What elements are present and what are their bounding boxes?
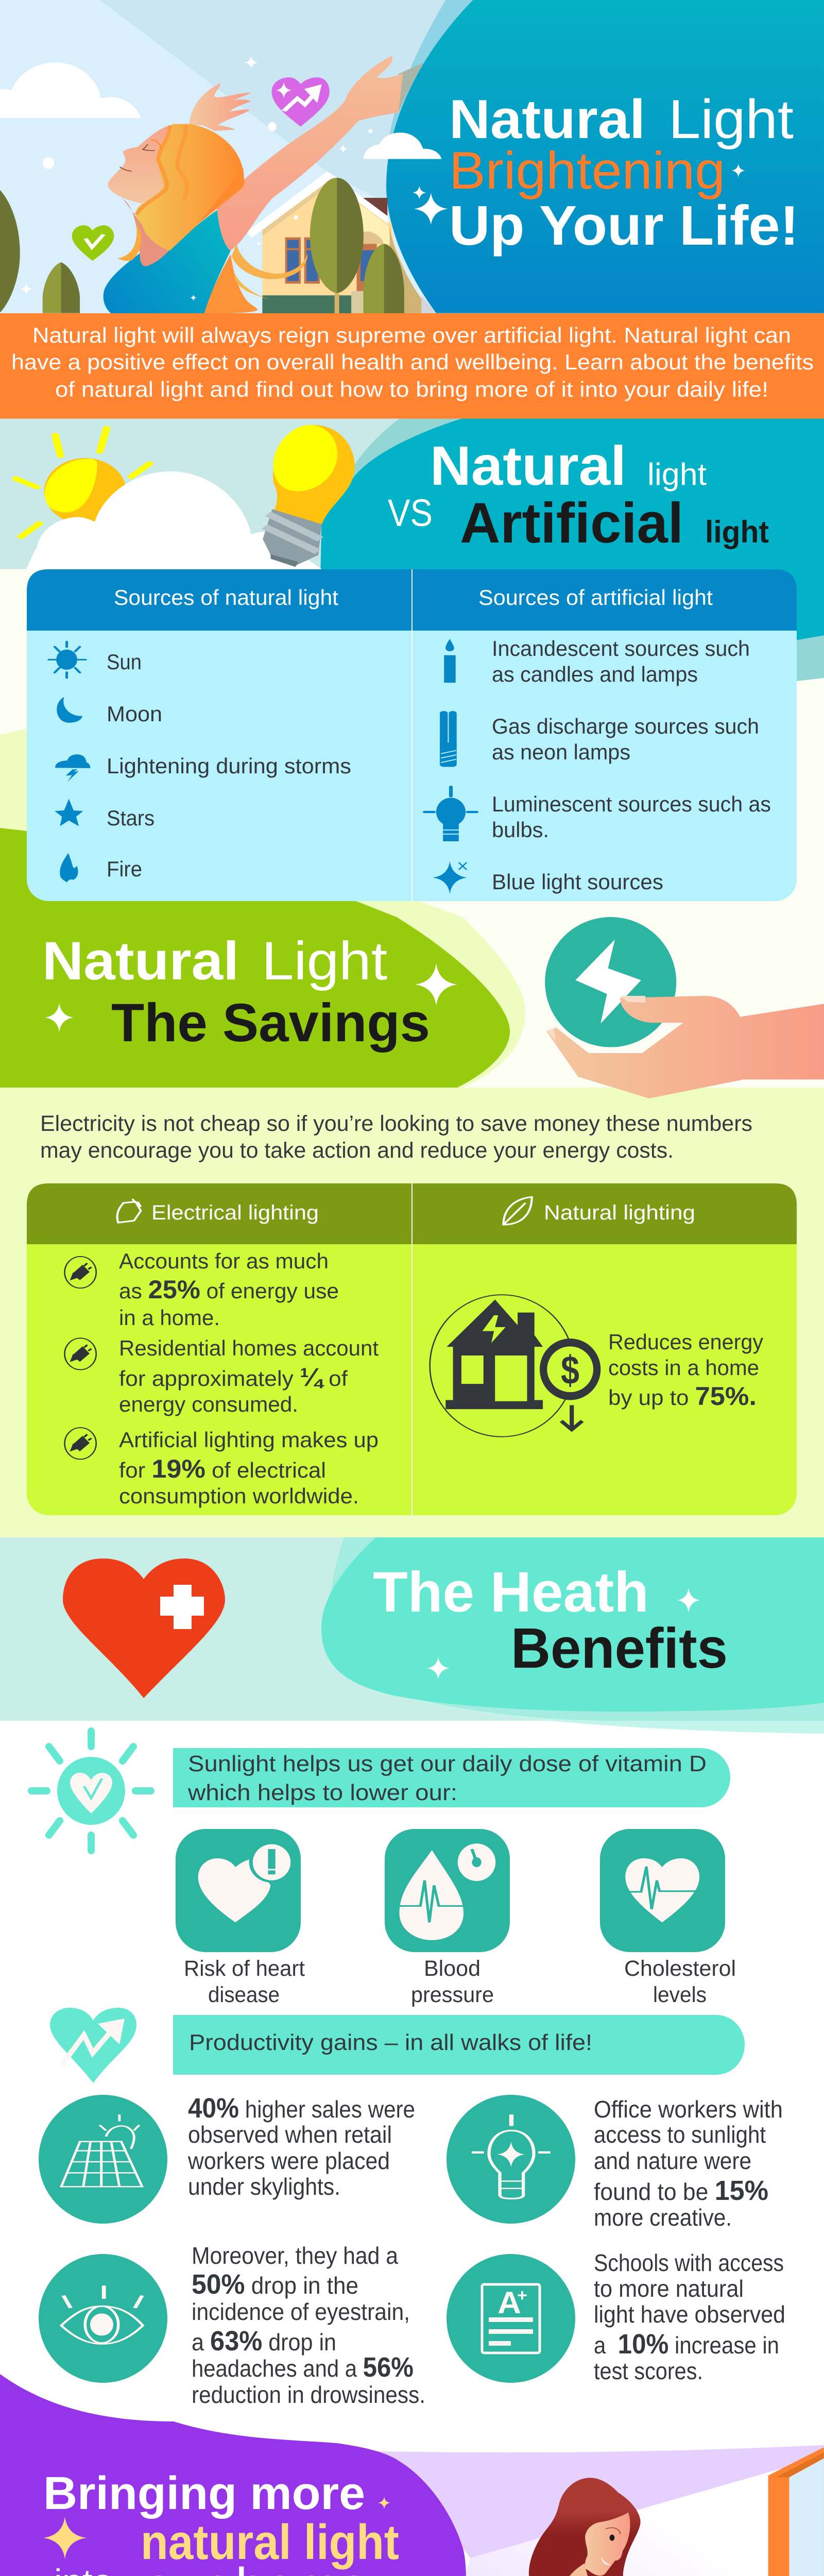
tree small (43, 262, 80, 313)
natural sources list: Sun (107, 650, 142, 674)
title: Natural light VS Artificial light (388, 434, 769, 555)
callout: productivity gains (173, 2015, 745, 2075)
icon: A plus paper: + (517, 2286, 527, 2304)
icon: star (55, 799, 83, 826)
artificial sources list (492, 636, 771, 894)
tile: risk of heart disease: Risk of heart (184, 1956, 305, 1981)
icon: idea bulb (472, 2114, 551, 2198)
icon: blue light sparkle (433, 861, 467, 894)
title: Natural Light The Savings: Light (262, 931, 387, 991)
title: Natural Light The Savings: The Savings (111, 993, 430, 1053)
house (247, 171, 436, 314)
table: electrical vs natural lighting (27, 1183, 797, 1515)
plug bullet icons (65, 1257, 96, 1459)
stat: eyestrain: headaches and a 56% (192, 2352, 414, 2383)
icon: candle (444, 639, 456, 683)
icon: plug outline (117, 1199, 141, 1223)
stat: office creativity: access to sunlight (594, 2121, 766, 2148)
title: Natural Light Brightening Up Your Life (449, 88, 799, 257)
icon: house with dollar saving (430, 1295, 600, 1437)
icon: storm (55, 754, 91, 782)
electrical facts: consumption worldwide. (119, 1484, 359, 1508)
title: Bringing more natural light into your home: natural light (141, 2515, 399, 2570)
artificial sources list: Luminescent sources such as (492, 792, 771, 816)
source icons (49, 639, 477, 894)
callout: vitamin D (173, 1748, 730, 1807)
artificial sources list: Incandescent sources such (492, 636, 750, 660)
hero illustration (0, 0, 824, 314)
stat: eyestrain: reduction in drowsiness. (192, 2381, 425, 2408)
icon: sun with heart (31, 1731, 151, 1851)
natural sources list: Stars (107, 806, 154, 830)
column heading electrical: Electrical lighting (151, 1201, 319, 1224)
natural sources list: Lightening during storms (107, 754, 351, 778)
background: hero sky (0, 0, 824, 313)
natural lighting fact: by up to 75%. (608, 1382, 757, 1411)
stat: retail sales: 40% higher sales were (188, 2093, 415, 2124)
title: Natural light VS Artificial light: light (647, 457, 707, 492)
artificial sources list: as candles and lamps (492, 662, 698, 686)
savings intro text: Electricity is not cheap so if you’re looking to save money these numbers (40, 1111, 752, 1136)
electrical facts: for 19% of electrical (119, 1454, 326, 1483)
intro band: of natural light and find out how to bring more of it into your daily life! (55, 377, 768, 401)
stat: test scores (447, 2249, 785, 2384)
title: Natural Light The Savings: Natural (42, 931, 239, 991)
stat: office creativity (447, 2095, 783, 2231)
icon: gas lamp (440, 711, 457, 767)
icon: red heart with cross (63, 1558, 225, 1698)
background: savings panel (0, 1088, 824, 1537)
icon: plug 3 (65, 1428, 96, 1459)
dollar sign: $ (561, 1347, 579, 1393)
artificial sources list: Blue light sources (492, 870, 663, 894)
stat: office creativity: and nature were (594, 2147, 751, 2174)
electrical facts: Accounts for as much (119, 1249, 329, 1273)
electrical facts: as 25% of energy use (119, 1275, 339, 1304)
natural sources list: Moon (107, 702, 162, 726)
icon: sun (49, 641, 85, 678)
electrical facts: Artificial lighting makes up (119, 1428, 379, 1452)
intro band: have a positive effect on overall health and wellbeing. Learn about the benefits (11, 350, 814, 374)
title: Natural light VS Artificial light: light (705, 515, 769, 549)
background: health header (0, 1537, 824, 2576)
icon: green heart with check (72, 225, 114, 261)
illustration: hand holding energy coin (545, 917, 824, 1098)
blue title panel (386, 0, 824, 313)
natural lighting fact: Reduces energy (608, 1330, 763, 1354)
title: Bringing more natural light into your home (43, 2468, 399, 2576)
savings intro text: may encourage you to take action and reduce your energy costs. (40, 1138, 674, 1163)
title: Natural light VS Artificial light: Natural (430, 434, 626, 497)
natural sources list (107, 650, 351, 881)
natural lighting fact (608, 1330, 763, 1411)
tile: risk of heart disease: disease (208, 1982, 280, 2007)
cloud (26, 471, 321, 569)
title: Natural Light Brightening Up Your Life: Brightening (449, 141, 725, 200)
icon: sun (16, 428, 150, 537)
icon: A plus paper (482, 2284, 540, 2353)
illustration: window frame (768, 2447, 824, 2576)
table: sources of natural and artificial light (27, 569, 797, 901)
title: The Heath Benefits (373, 1561, 728, 1680)
tile: cholesterol levels: Cholesterol (624, 1956, 736, 1981)
tile: blood pressure (385, 1829, 510, 2007)
column heading artificial: Sources of artificial light (478, 585, 713, 609)
tile: cholesterol levels (600, 1829, 736, 2007)
blue title panel edge (388, 0, 473, 145)
tile: cholesterol levels: levels (653, 1982, 707, 2007)
intro band: Natural light will always reign supreme over artificial light. Natural light can (32, 323, 791, 347)
artificial sources list: Gas discharge sources such (492, 714, 759, 738)
icon: leaf outline (504, 1197, 532, 1225)
stat: office creativity: found to be 15% (594, 2175, 768, 2206)
stat: eyestrain: 50% drop in the (192, 2269, 358, 2300)
cloud small (364, 132, 441, 159)
icon: purple heart with arrow (272, 77, 330, 127)
callout: productivity gains: Productivity gains – in all walks of life! (189, 2030, 592, 2055)
icon: bulb (424, 787, 477, 841)
artificial sources list: as neon lamps (492, 740, 630, 764)
woman with raised arms (104, 56, 424, 313)
natural lighting fact: costs in a home (608, 1355, 759, 1380)
icon: A plus paper: A (497, 2285, 521, 2320)
artificial sources list: bulbs. (492, 818, 549, 842)
icon: plug 2 (65, 1338, 96, 1370)
stat: office creativity: Office workers with (594, 2096, 783, 2123)
icon: eye (61, 2285, 143, 2344)
stat: eyestrain: incidence of eyestrain, (192, 2298, 410, 2325)
stat: test scores: to more natural (594, 2275, 744, 2302)
icon: light bulb (263, 425, 355, 567)
sparkles and dots (20, 56, 745, 301)
savings intro text (40, 1111, 752, 1163)
column heading natural: Natural lighting (544, 1201, 695, 1224)
illustration: woman reading a book (510, 2478, 738, 2576)
stat: test scores: test scores. (594, 2358, 703, 2384)
icon: fire (60, 853, 78, 883)
title: Natural Light Brightening Up Your Life: Natural (449, 88, 645, 150)
stat: retail sales: under skylights. (188, 2173, 340, 2200)
title: Natural Light Brightening Up Your Life: Up Your Life! (449, 194, 799, 257)
icon: moon (57, 697, 82, 723)
electrical facts (119, 1249, 379, 1508)
icon: plug 1 (65, 1257, 96, 1288)
electrical facts: for approximately ¼ of (119, 1363, 348, 1392)
stat: office creativity: more creative. (594, 2204, 732, 2231)
title: Natural Light Brightening Up Your Life: Light (668, 88, 794, 150)
stat: retail sales (39, 2093, 415, 2224)
background: bringing light room (0, 2374, 824, 2576)
intro band (0, 313, 824, 419)
tree far left (0, 190, 20, 313)
callout: vitamin D: Sunlight helps us get our daily dose of vitamin D (188, 1751, 707, 1776)
tile: blood pressure: Blood (424, 1956, 480, 1981)
stat: retail sales: observed when retail (188, 2121, 392, 2148)
tile: risk of heart disease (176, 1829, 305, 2007)
stat: test scores: Schools with access (594, 2249, 784, 2276)
title: Natural light VS Artificial light: VS (388, 492, 433, 534)
electrical facts: energy consumed. (119, 1392, 298, 1416)
background: natural vs artificial and savings (0, 419, 824, 1088)
icon: solar panel (61, 2114, 142, 2187)
stat: eyestrain (39, 2242, 425, 2408)
icon: heart with rising arrow (50, 2008, 136, 2083)
electrical facts: in a home. (119, 1306, 220, 1330)
title: Bringing more natural light into your home: Bringing more (43, 2468, 365, 2519)
title: The Heath Benefits: The Heath (373, 1561, 649, 1624)
electrical facts: Residential homes account (119, 1336, 379, 1360)
stat: test scores: light have observed (594, 2301, 785, 2328)
stat: eyestrain: a 63% drop in (192, 2326, 336, 2357)
title: Natural Light The Savings (42, 931, 457, 1053)
title: The Heath Benefits: Benefits (511, 1617, 728, 1680)
stat: retail sales: workers were placed (187, 2147, 390, 2174)
tile: blood pressure: pressure (411, 1982, 494, 2007)
cloud left (0, 62, 141, 118)
stat: test scores: a 10% increase in (594, 2329, 779, 2360)
column heading natural: Sources of natural light (114, 585, 338, 609)
illustration: sun, cloud and light bulb (16, 425, 355, 569)
natural sources list: Fire (107, 857, 142, 881)
title: Natural light VS Artificial light: Artificial (460, 492, 683, 555)
callout: vitamin D: which helps to lower our: (187, 1780, 457, 1805)
light beam (100, 0, 457, 205)
stat: eyestrain: Moreover, they had a (192, 2242, 398, 2269)
